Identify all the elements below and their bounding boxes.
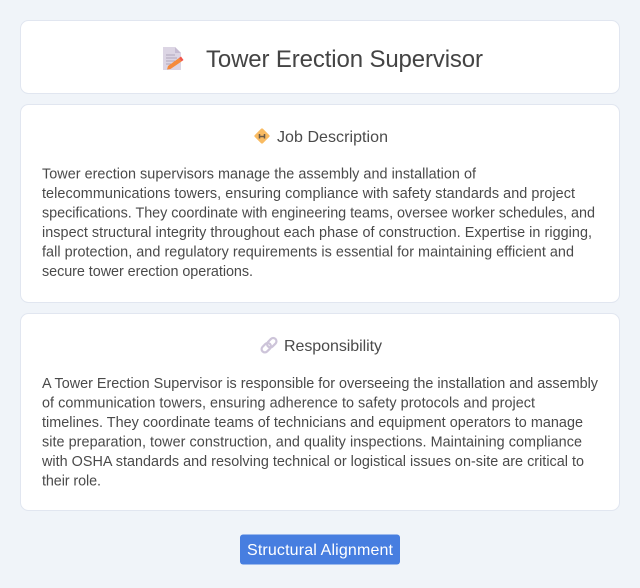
icon: chain link bbox=[260, 337, 278, 354]
panel: responsibility bbox=[20, 314, 620, 510]
text block: job description: specifications. They coordinate with engineering teams, oversee worker schedules, and bbox=[42, 206, 595, 222]
heading: responsibility: Responsibility bbox=[284, 338, 382, 355]
text block: job description bbox=[42, 166, 595, 280]
text block: responsibility bbox=[41, 376, 599, 490]
text block: job description: secure tower erection operations. bbox=[42, 264, 253, 280]
icon: diamond road sign bbox=[254, 128, 270, 144]
text block: responsibility: with OSHA standards and resolving technical or logistical issues on-site are critical to bbox=[41, 454, 584, 470]
panel: job description bbox=[20, 104, 620, 302]
text block: job description: inspect structural integrity throughout each phase of construction. Expertise in rigging, bbox=[42, 225, 592, 241]
icon: document with pencil bbox=[163, 47, 184, 70]
heading: job description: Job Description bbox=[277, 129, 388, 146]
text block: responsibility: their role. bbox=[42, 474, 101, 490]
button: structural alignment bbox=[240, 534, 400, 564]
text block: job description: fall protection, and regulatory requirements is essential for maintaining efficient and bbox=[42, 244, 574, 260]
button: structural alignment: Structural Alignment bbox=[247, 542, 394, 559]
text block: job description: Tower erection supervisors manage the assembly and installation of bbox=[42, 166, 477, 182]
text block: responsibility: A Tower Erection Supervisor is responsible for overseeing the installation and assembly bbox=[42, 376, 599, 392]
panel: title card bbox=[20, 20, 620, 94]
title: Tower Erection Supervisor bbox=[206, 46, 483, 73]
text block: responsibility: of communication towers, ensuring adherence to safety protocols and project bbox=[42, 396, 535, 412]
text block: responsibility: timelines. They coordinate teams of technicians and equipment operators to manage bbox=[42, 415, 583, 431]
text block: job description: telecommunications towers, ensuring compliance with safety standards and project bbox=[42, 186, 575, 202]
text block: responsibility: site preparation, tower construction, and quality inspections. Maintaining compliance bbox=[42, 434, 582, 450]
